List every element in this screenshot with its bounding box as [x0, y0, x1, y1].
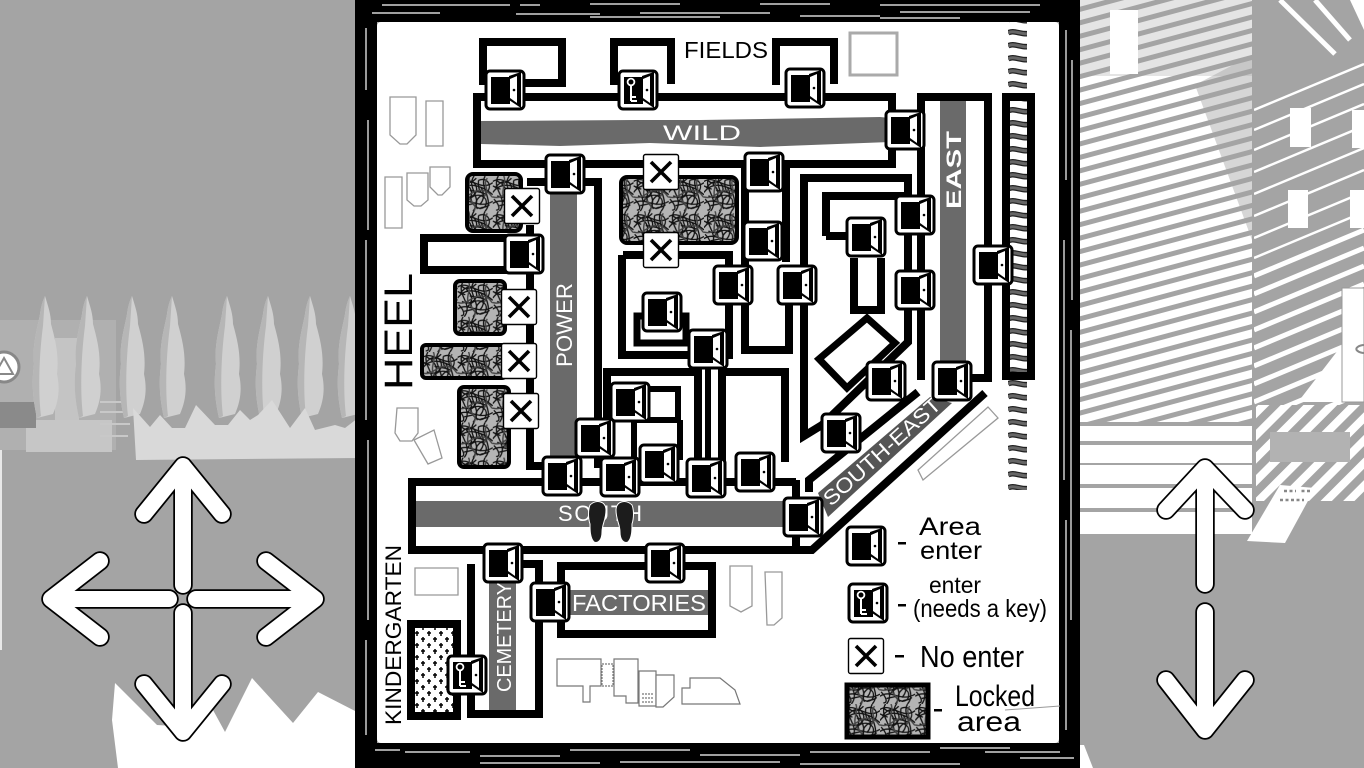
arrow down — [144, 613, 222, 732]
legend: enter needs a key: enter — [929, 572, 981, 598]
door markers on map — [448, 69, 1012, 694]
door: south row second — [601, 458, 639, 496]
arrow right — [196, 561, 315, 637]
legend: no enter — [848, 638, 1024, 674]
central corridor — [745, 165, 789, 350]
faded building outlines — [385, 33, 998, 625]
light jagged ground band — [133, 400, 358, 460]
dark hatched building — [1254, 64, 1364, 438]
door: wild to east — [886, 111, 924, 149]
label: power: POWER — [552, 283, 577, 367]
door: centre right room — [778, 266, 816, 304]
door: power to south — [543, 457, 581, 495]
upper window — [1110, 10, 1138, 74]
diamond room — [819, 318, 895, 388]
map panel — [355, 0, 1080, 768]
door: south-east upper — [867, 362, 905, 400]
door: fields west — [486, 71, 524, 109]
shaded wall corner — [1195, 55, 1252, 240]
no-enter marker: upper left locked area — [504, 188, 540, 224]
white map paper — [377, 22, 1059, 743]
road: south-east — [818, 397, 952, 517]
south-east walls — [796, 392, 985, 550]
door: wild to power — [546, 155, 584, 193]
power area wall — [527, 182, 598, 468]
speckled block — [1270, 432, 1350, 462]
windows — [1288, 108, 1364, 228]
door: zebra strip — [974, 246, 1012, 284]
arrow left — [51, 561, 169, 637]
fields rooms — [483, 42, 834, 85]
legend: area enter: enter — [920, 537, 982, 565]
zebra stripe strip — [1008, 22, 1027, 490]
small inner room — [637, 316, 686, 343]
door: centre left room — [714, 266, 752, 304]
south area wall — [412, 482, 800, 550]
no-enter marker: heel locked area one — [502, 290, 536, 324]
wild area wall — [477, 97, 892, 164]
door: south row third — [640, 445, 678, 483]
legend: enter needs a key: (needs a key) — [913, 595, 1047, 623]
road: cemetery — [489, 580, 516, 712]
kindergarten area — [411, 624, 457, 716]
white jagged foreground — [112, 678, 357, 768]
no-enter marker: large locked area bottom — [644, 232, 678, 268]
door: east upper — [896, 196, 934, 234]
label: south: SOUTH — [558, 501, 642, 526]
label: east: EAST — [943, 131, 966, 209]
key door: fields middle — [619, 71, 657, 109]
shaded upper wall — [1080, 0, 1252, 76]
door: factories top — [646, 544, 684, 582]
right background scene — [1080, 0, 1364, 768]
label: kindergarten: KINDERGARTEN — [381, 545, 406, 725]
horizontal plank stripes — [1080, 424, 1252, 534]
door: fields east — [786, 69, 824, 107]
corner scrap — [1080, 745, 1093, 768]
door: factories left — [531, 583, 569, 621]
small lower rooms — [634, 389, 680, 470]
key door: kindergarten — [448, 656, 486, 694]
door: centre corridor middle — [744, 222, 782, 260]
inner room by door — [826, 196, 905, 310]
hatched building wall — [1080, 0, 1252, 422]
no-enter marker: heel locked area two — [502, 344, 536, 378]
row of cypress trees — [33, 296, 364, 418]
door: east lower — [896, 271, 934, 309]
road: power — [550, 190, 577, 460]
door: lower room top — [611, 383, 649, 421]
label: cemetery: CEMETERY — [494, 582, 516, 692]
arrow up — [144, 466, 222, 585]
label: wild: WILD — [663, 122, 741, 145]
road: south — [415, 501, 787, 527]
connecting inner rooms — [622, 255, 729, 355]
zebra outlined box — [1006, 97, 1031, 376]
arrow down, right side — [1166, 612, 1245, 730]
no-enter marker: heel locked area three — [504, 394, 538, 428]
door: small inner room — [643, 293, 681, 331]
label: factories: FACTORIES — [572, 590, 706, 616]
door: heel room — [505, 235, 543, 273]
road: factories — [570, 590, 708, 615]
door: south row fifth — [736, 453, 774, 491]
road: wild — [481, 117, 890, 147]
lower rooms — [607, 372, 785, 470]
wall network — [412, 42, 988, 714]
legend: area enter: Area — [919, 513, 981, 541]
cemetery wall — [471, 564, 539, 714]
door: east chamber — [847, 218, 885, 256]
door: east to south-east — [933, 362, 971, 400]
factories wall — [561, 566, 712, 634]
label: south-east: SOUTH-EAST — [819, 393, 946, 511]
building in background — [0, 320, 132, 452]
keypad — [1247, 485, 1315, 543]
door: south row fourth — [687, 459, 725, 497]
no-enter marker: large locked area top — [644, 154, 678, 190]
icon: footprints — [588, 502, 634, 543]
door: south to south-east — [784, 498, 822, 536]
road: east — [940, 100, 966, 368]
locked scribble areas — [422, 174, 737, 467]
legend — [847, 513, 1060, 737]
door: centre corridor top — [745, 153, 783, 191]
inner east chamber wall — [804, 178, 908, 436]
door: lower room left — [576, 419, 614, 457]
white sign — [1298, 288, 1364, 402]
legend: locked area — [847, 680, 1060, 737]
legend: no enter: No enter — [920, 639, 1024, 674]
roof lines — [1280, 0, 1364, 54]
left movement arrows — [51, 466, 315, 732]
door: narrow corridor — [689, 330, 727, 368]
narrow corridor — [705, 365, 711, 470]
right movement arrows — [1166, 468, 1245, 730]
label: heel: HEEL — [377, 273, 421, 390]
east area wall — [921, 97, 988, 380]
heel room — [424, 238, 510, 270]
diagonal hatched step — [1256, 405, 1364, 501]
legend: area enter — [847, 513, 982, 565]
legend: locked area: area — [957, 706, 1021, 737]
left background scene — [0, 0, 364, 768]
legend: enter needs a key — [849, 572, 1047, 623]
factory floorplan outlines — [557, 659, 740, 707]
scratchy black frame — [355, 0, 1080, 768]
door: cemetery — [484, 544, 522, 582]
door: south-east lower — [822, 414, 860, 452]
legend: locked area: Locked — [955, 680, 1035, 713]
arrow up, right side — [1166, 468, 1245, 584]
label: fields: FIELDS — [684, 37, 768, 63]
